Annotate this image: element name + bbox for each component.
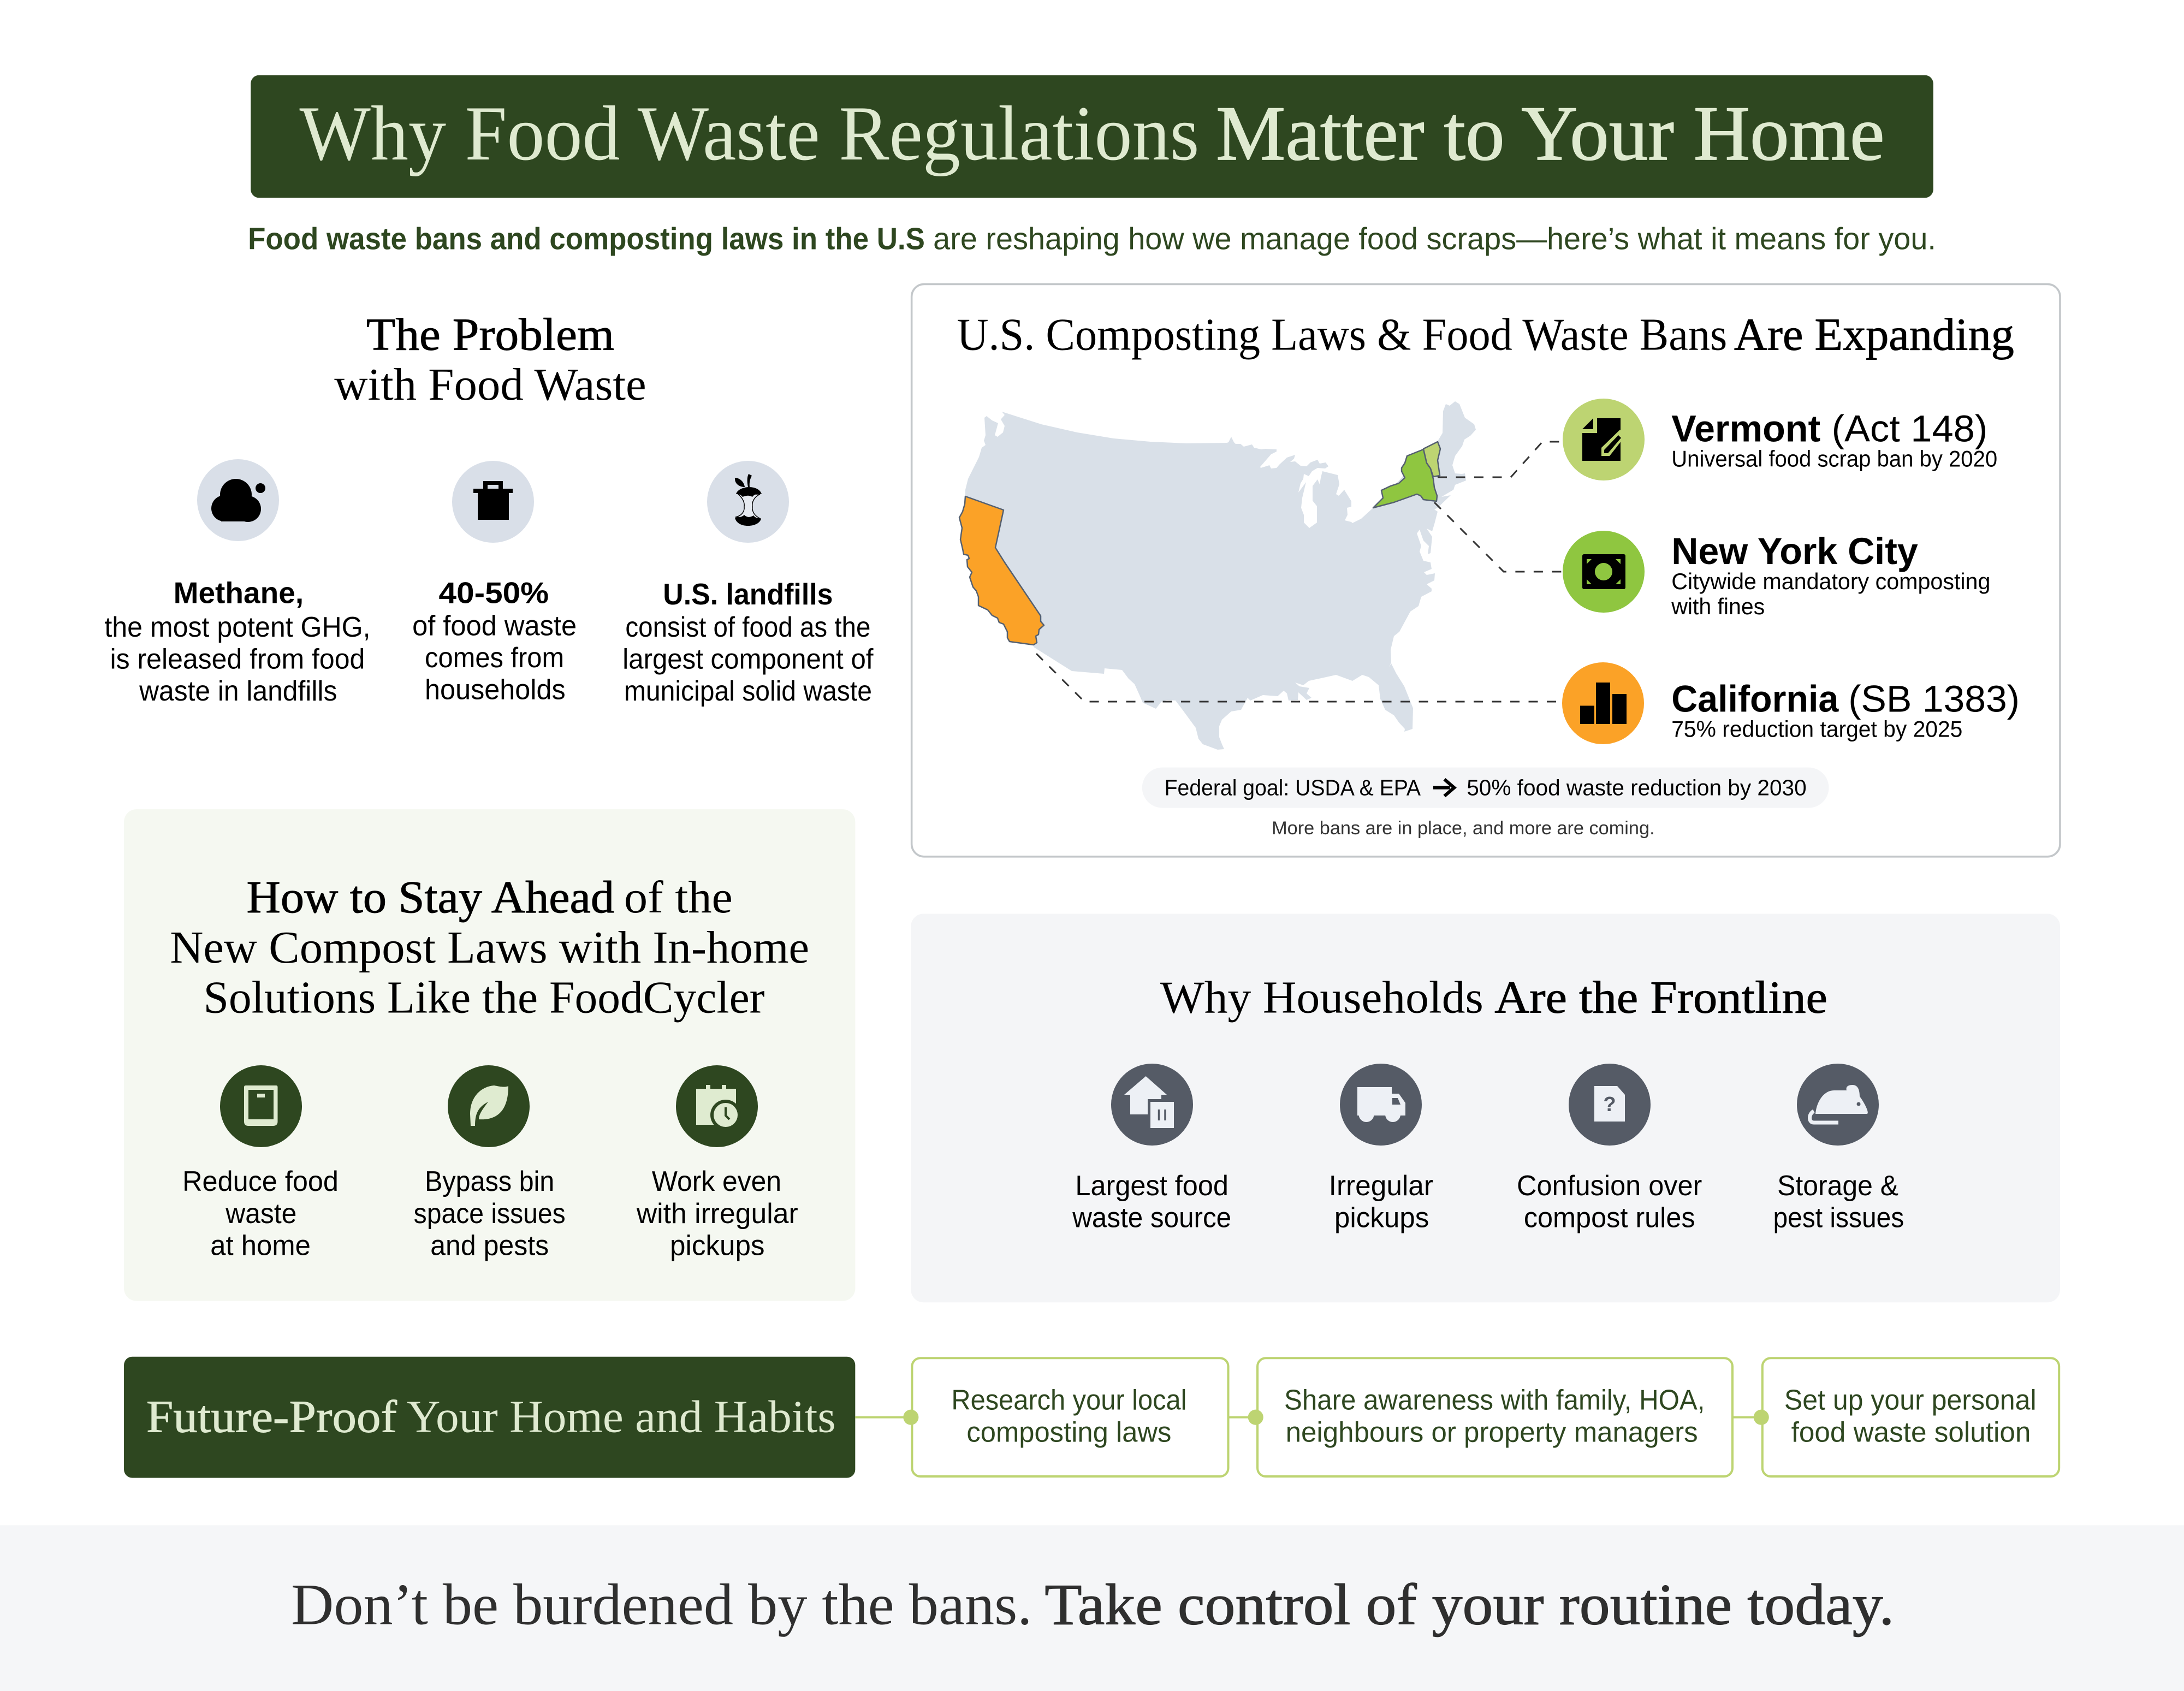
icon: question document xyxy=(1569,1064,1651,1146)
map: United States xyxy=(959,401,1476,750)
callout: Vermont xyxy=(1671,408,1997,472)
icon: calendar clock xyxy=(676,1065,758,1147)
stat: U.S. landfills xyxy=(622,577,874,707)
callout: California: (SB 1383) xyxy=(1848,678,2020,720)
heading: households: Why Households xyxy=(1160,972,1483,1023)
state: New York xyxy=(1373,449,1437,508)
icon: methane cloud xyxy=(197,459,279,541)
step connectors xyxy=(855,1410,1769,1425)
stat: U.S. landfills: consist of food as the xyxy=(625,612,870,643)
future-proof banner: Future-Proof xyxy=(146,1391,397,1442)
icon: New York money xyxy=(1563,531,1645,613)
heading: laws expanding: U.S. Composting Laws & Food Waste Bans xyxy=(957,309,1727,360)
stat: methane xyxy=(104,576,371,707)
stat: 40-50%: households xyxy=(425,674,566,706)
label: storage xyxy=(1773,1170,1904,1233)
callout: California xyxy=(1671,678,2020,741)
stat: methane: is released from food xyxy=(110,643,365,675)
subtitle: are reshaping how we manage food scraps—here’s what it means for you. xyxy=(933,222,1936,256)
heading: how to stay ahead: Solutions Like the FoodCycler xyxy=(203,972,765,1023)
step: personal solution: food waste solution xyxy=(1791,1416,2031,1448)
stat: methane: Methane, xyxy=(174,576,304,610)
step: personal solution: Set up your personal xyxy=(1784,1385,2037,1416)
footer call to action xyxy=(0,1525,2184,1691)
heading: households xyxy=(1160,972,1827,1023)
stat: 40-50%: comes from xyxy=(425,642,564,674)
callout: New York City: New York City xyxy=(1671,530,1918,572)
panel: U.S. composting laws xyxy=(912,284,2060,857)
callout: New York City: with fines xyxy=(1671,594,1765,619)
label: irregular pickups: Irregular xyxy=(1329,1170,1433,1202)
icon: apple core xyxy=(707,461,789,543)
stat: 40-50% xyxy=(412,576,577,706)
connector: New York City xyxy=(1434,502,1563,572)
connector: California xyxy=(1036,654,1563,702)
label: reduce food waste: Reduce food xyxy=(182,1166,339,1197)
stat: methane: the most potent GHG, xyxy=(104,612,371,643)
callout: Vermont: Vermont xyxy=(1671,408,1820,450)
label: reduce food waste xyxy=(182,1166,339,1261)
panel: how to stay ahead xyxy=(124,809,855,1301)
connector: Vermont xyxy=(1438,442,1563,477)
federal goal pill: Federal goal: USDA & EPA xyxy=(1165,775,1421,800)
heading: how to stay ahead xyxy=(170,872,809,1023)
footer call to action: Take control of your routine today. xyxy=(1044,1573,1894,1637)
icon: trash bin xyxy=(452,461,534,543)
callout: Vermont: Universal food scrap ban by 2020 xyxy=(1671,446,1997,472)
step: research local laws: composting laws xyxy=(966,1416,1171,1448)
label: largest food waste source: waste source xyxy=(1072,1202,1231,1233)
label: work even: with irregular xyxy=(636,1198,798,1230)
panel: the problem with food waste xyxy=(104,309,874,707)
heading: the problem xyxy=(334,309,646,410)
callout: California: 75% reduction target by 2025 xyxy=(1671,716,1962,741)
state: Vermont xyxy=(1423,442,1440,477)
icon: food cycler appliance xyxy=(220,1065,302,1147)
icon: leaf xyxy=(448,1065,530,1147)
label: bypass bin: space issues xyxy=(414,1198,566,1230)
title banner: Why Food Waste Regulations xyxy=(299,90,1199,176)
icon: question document: ? xyxy=(1603,1093,1616,1116)
heading: how to stay ahead: How to Stay Ahead xyxy=(247,872,614,923)
callout: New York City: Citywide mandatory composting xyxy=(1671,568,1990,594)
heading: the problem: with Food Waste xyxy=(334,359,646,410)
step: share awareness: neighbours or property managers xyxy=(1286,1416,1698,1448)
future-proof banner: Your Home and Habits xyxy=(407,1391,836,1442)
label: bypass bin xyxy=(414,1166,566,1261)
federal goal pill xyxy=(1142,768,1829,808)
label: irregular pickups xyxy=(1329,1170,1433,1233)
callout: New York City xyxy=(1671,530,1990,619)
step: research local laws xyxy=(912,1358,1228,1476)
heading: the problem: The Problem xyxy=(366,309,614,360)
label: irregular pickups: pickups xyxy=(1334,1202,1429,1233)
icon: truck xyxy=(1340,1064,1422,1146)
callout: Vermont: (Act 148) xyxy=(1832,408,1987,450)
subtitle xyxy=(248,222,1936,256)
label: reduce food waste: waste xyxy=(225,1198,296,1230)
heading: households: Are the Frontline xyxy=(1494,972,1827,1023)
label: largest food waste source xyxy=(1072,1170,1231,1233)
label: work even xyxy=(636,1166,798,1261)
label: work even: pickups xyxy=(670,1230,765,1261)
label: reduce food waste: at home xyxy=(210,1230,311,1261)
label: confusion: compost rules xyxy=(1524,1202,1695,1233)
stat: methane: waste in landfills xyxy=(139,675,337,707)
stat: 40-50%: of food waste xyxy=(412,610,577,642)
stat: U.S. landfills: U.S. landfills xyxy=(663,577,833,611)
icon: Vermont document xyxy=(1563,399,1645,480)
icon: California bars xyxy=(1562,662,1644,744)
step: research local laws: Research your local xyxy=(951,1385,1186,1416)
stat: U.S. landfills: municipal solid waste xyxy=(624,675,872,707)
icon: house and bin xyxy=(1111,1064,1193,1146)
label: work even: Work even xyxy=(652,1166,781,1197)
federal goal pill: 50% food waste reduction by 2030 xyxy=(1467,775,1807,800)
heading: how to stay ahead: New Compost Laws with In-home xyxy=(170,922,809,973)
label: confusion xyxy=(1517,1170,1702,1233)
step: share awareness: Share awareness with family, HOA, xyxy=(1284,1385,1705,1416)
label: bypass bin: Bypass bin xyxy=(425,1166,554,1197)
title banner: Matter to Your Home xyxy=(1216,90,1885,176)
stat: 40-50%: 40-50% xyxy=(439,576,549,610)
step: share awareness xyxy=(1257,1358,1732,1476)
heading: laws expanding: Are Expanding xyxy=(1734,309,2014,360)
label: bypass bin: and pests xyxy=(430,1230,549,1261)
future-proof banner xyxy=(124,1357,855,1478)
label: largest food waste source: Largest food xyxy=(1075,1170,1228,1202)
callout: California: California xyxy=(1671,678,1839,720)
state: California xyxy=(959,496,1044,645)
caption: More bans are in place, and more are coming. xyxy=(1272,818,1655,839)
panel: why households are the frontline xyxy=(911,913,2060,1302)
label: confusion: Confusion over xyxy=(1517,1170,1702,1202)
label: storage: pest issues xyxy=(1773,1202,1904,1233)
stat: U.S. landfills: largest component of xyxy=(622,643,874,675)
label: storage: Storage & xyxy=(1777,1170,1898,1202)
step: personal solution xyxy=(1762,1358,2059,1476)
title banner xyxy=(251,75,1933,198)
icon: mouse xyxy=(1797,1064,1879,1146)
footer call to action: Don’t be burdened by the bans. xyxy=(291,1573,1032,1637)
subtitle: Food waste bans and composting laws in the U.S xyxy=(248,222,925,256)
heading: how to stay ahead: of the xyxy=(624,872,733,923)
